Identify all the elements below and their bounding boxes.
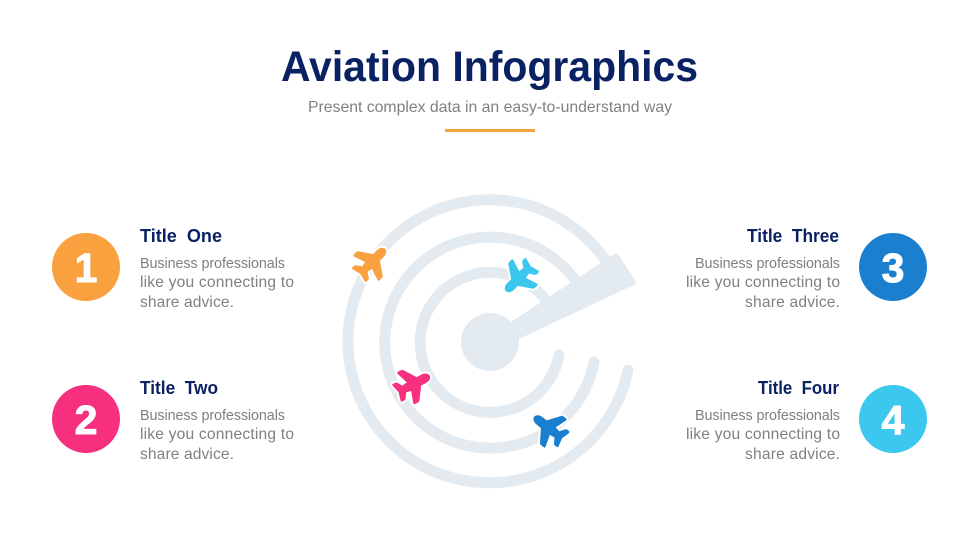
body: title three: share advice. bbox=[745, 294, 840, 311]
item two bbox=[52, 377, 294, 463]
heading: title one: Title One bbox=[140, 225, 222, 246]
body: title three bbox=[686, 256, 840, 311]
badge 2: 2 bbox=[75, 397, 97, 443]
body: title one: share advice. bbox=[140, 294, 234, 311]
body: title four: Business professionals bbox=[695, 408, 840, 424]
body: title two: Business professionals bbox=[140, 408, 285, 424]
body: title four: like you connecting to bbox=[686, 426, 840, 443]
body: title two bbox=[140, 408, 294, 463]
radar graphic bbox=[346, 200, 632, 483]
body: title two: like you connecting to bbox=[140, 426, 294, 443]
body: title two: share advice. bbox=[140, 446, 234, 463]
title underline bbox=[445, 129, 535, 132]
body: title three: like you connecting to bbox=[686, 274, 840, 291]
body: title four bbox=[686, 408, 840, 463]
radar sweep arm bbox=[505, 257, 632, 337]
item four bbox=[686, 377, 927, 463]
icon: cyan plane bbox=[493, 252, 545, 304]
body: title one: like you connecting to bbox=[140, 274, 294, 291]
subtitle: Present complex data in an easy-to-understand way bbox=[308, 99, 672, 116]
heading: title four: Title Four bbox=[758, 377, 839, 398]
icon: blue plane bbox=[523, 402, 575, 454]
body: title four: share advice. bbox=[745, 446, 840, 463]
icon: pink plane bbox=[388, 359, 438, 409]
badge 2 bbox=[52, 385, 120, 453]
badge 1: 1 bbox=[75, 245, 97, 291]
heading: title three: Title Three bbox=[747, 225, 839, 246]
heading: title two: Title Two bbox=[140, 377, 218, 398]
badge 1 bbox=[52, 233, 120, 301]
badge 3 bbox=[859, 233, 927, 301]
badge 4 bbox=[859, 385, 927, 453]
title: Aviation Infographics bbox=[281, 43, 698, 91]
radar rings bbox=[348, 200, 628, 483]
radar centre hub bbox=[461, 313, 519, 371]
body: title three: Business professionals bbox=[695, 256, 840, 272]
icon: orange plane bbox=[346, 236, 398, 288]
body: title one bbox=[140, 256, 294, 311]
badge 3: 3 bbox=[882, 245, 904, 291]
item one bbox=[52, 225, 294, 311]
item three bbox=[686, 225, 927, 311]
badge 4: 4 bbox=[882, 397, 905, 443]
body: title one: Business professionals bbox=[140, 256, 285, 272]
